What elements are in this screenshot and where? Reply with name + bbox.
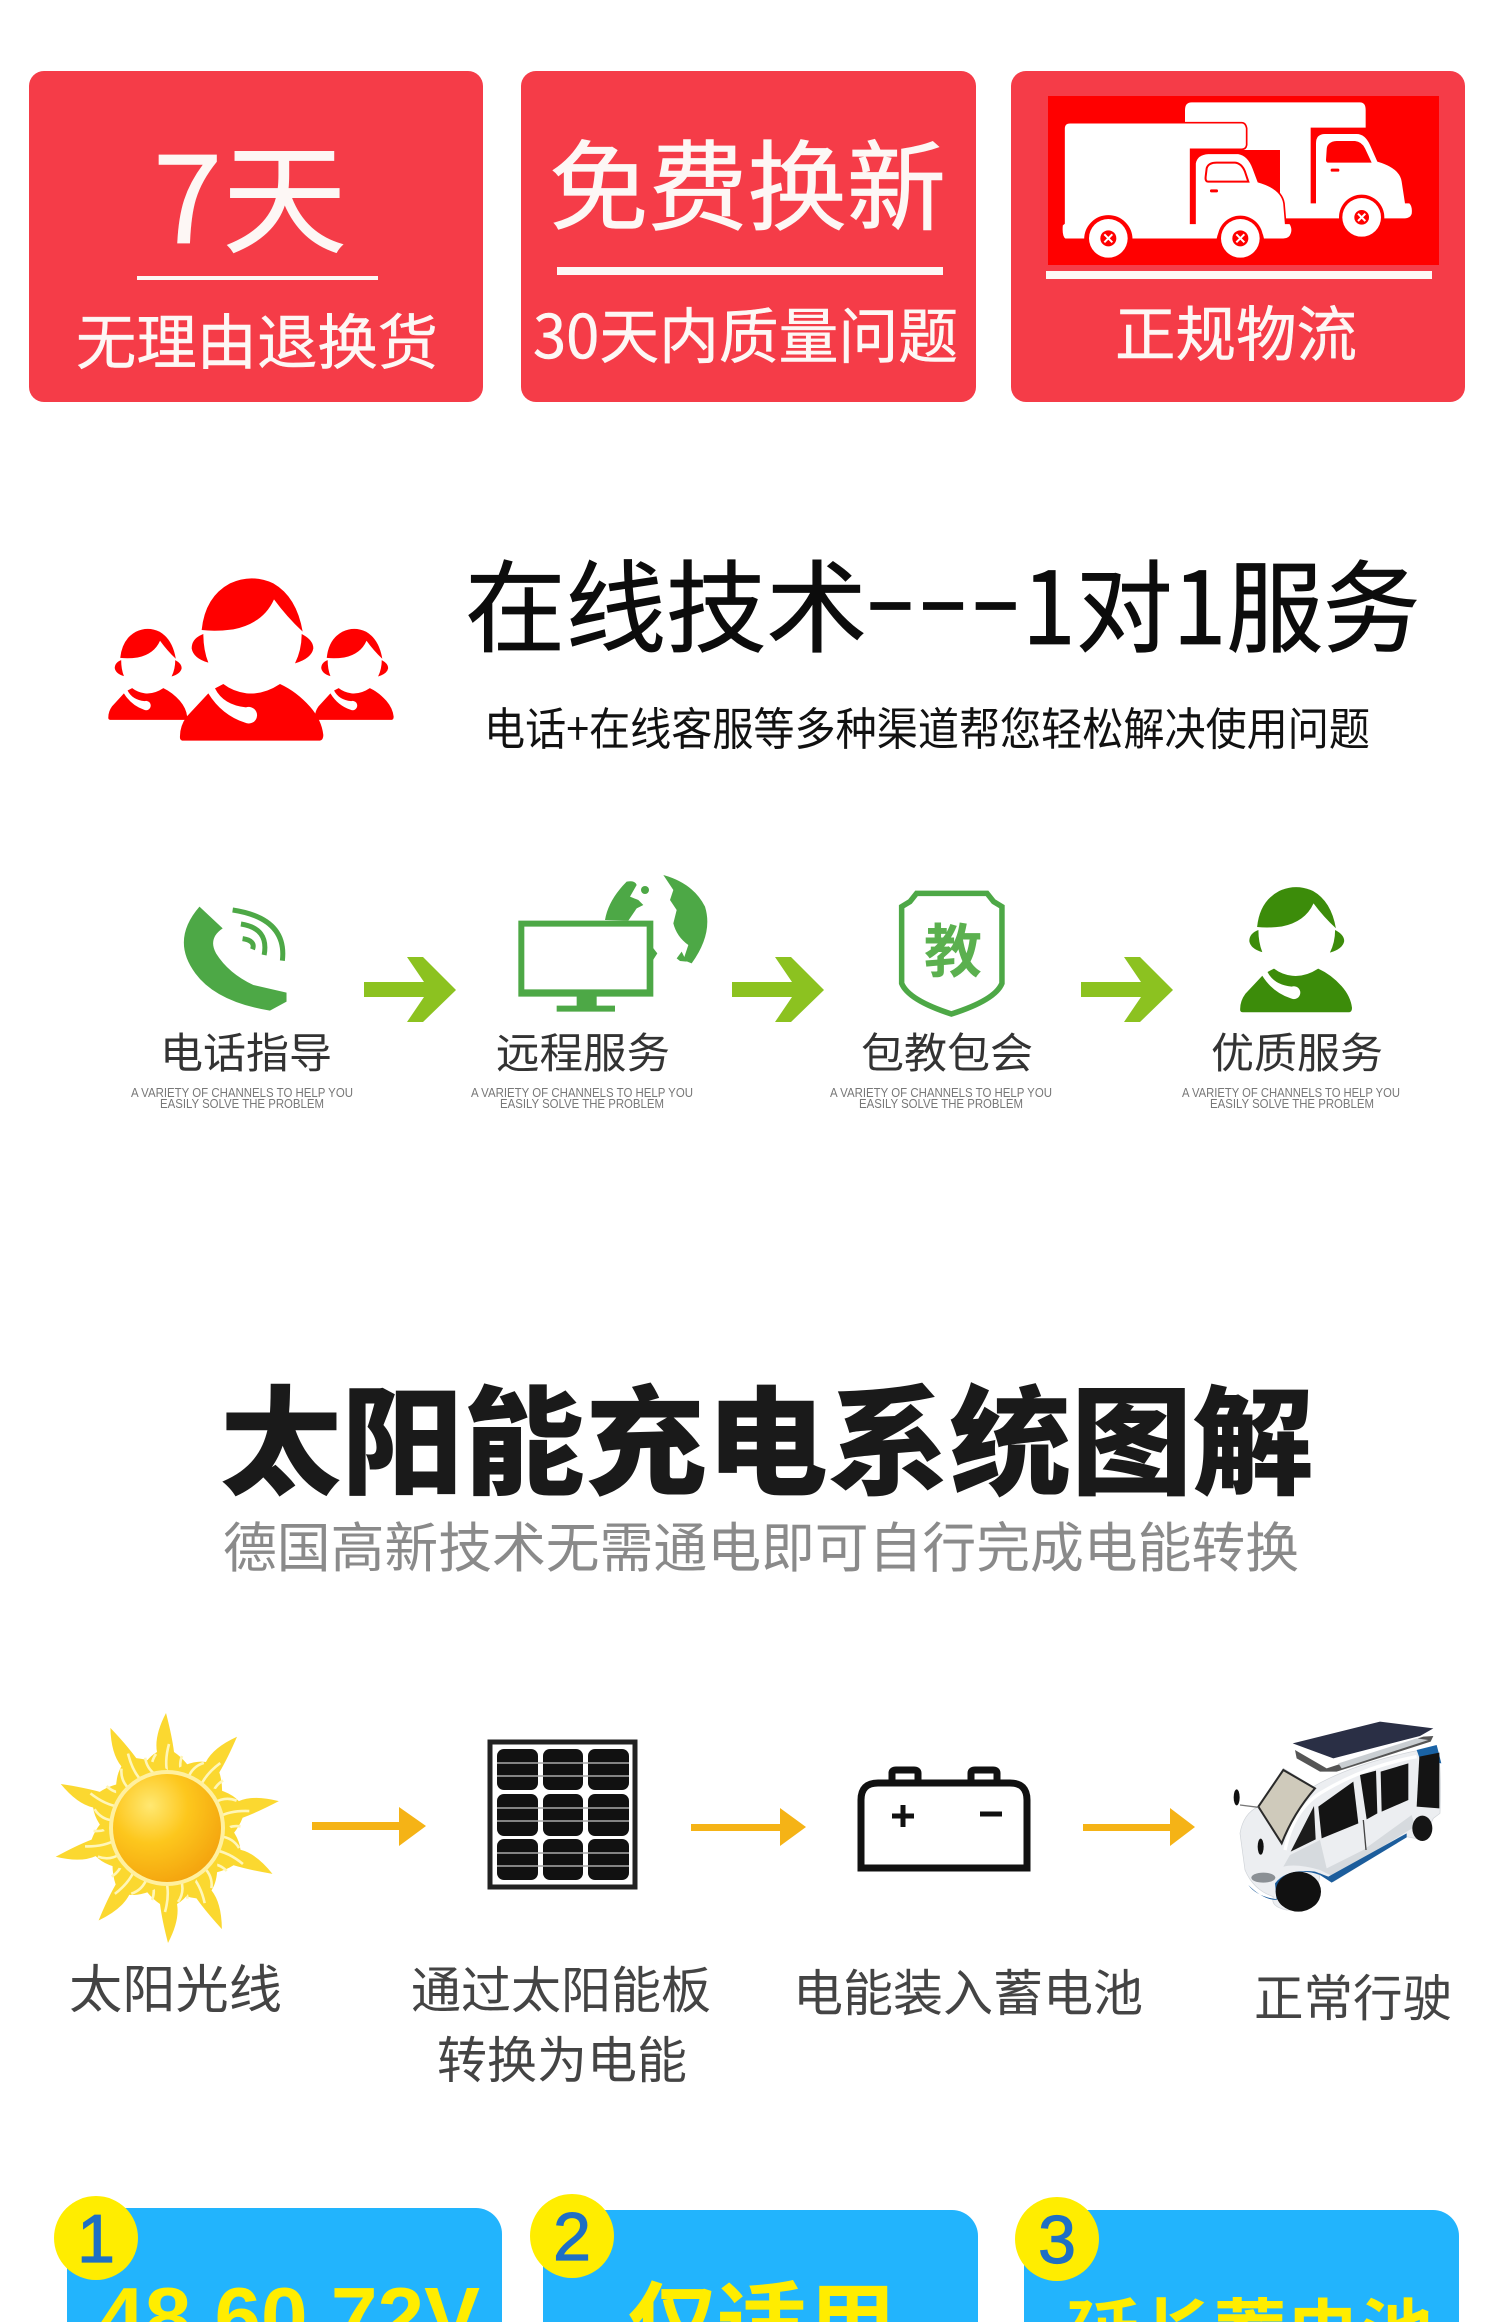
text: caption 4: A VARIETY OF CHANNELS TO HELP YOU bbox=[1182, 1085, 1400, 1100]
text: sunlight: 太阳光线 bbox=[69, 1948, 282, 2023]
heading: online technical support bbox=[465, 518, 1420, 673]
icon: support team bbox=[108, 578, 394, 741]
text: phone guidance: 电话指导 bbox=[160, 1020, 332, 1081]
heading: solar charging system diagram: 太阳能充电系统图解 bbox=[220, 1348, 1314, 1519]
arrow 2 bbox=[732, 957, 824, 1022]
text: through solar panel bbox=[411, 1951, 711, 2093]
panel: free replacement bbox=[521, 71, 976, 402]
icon: teaching shield bbox=[902, 893, 1002, 1014]
text: caption 4 bbox=[1182, 1085, 1400, 1111]
flow: service steps bbox=[131, 875, 1400, 1111]
badge: number 1: 1 bbox=[77, 2201, 115, 2277]
text: no reason returns: 无理由退换货 bbox=[76, 295, 438, 382]
heading: 7 days: 7天 bbox=[153, 104, 347, 278]
panel: applicable card bbox=[530, 2194, 978, 2322]
badge: number 3: 3 bbox=[1038, 2202, 1076, 2278]
badge: number 2 bbox=[530, 2194, 614, 2278]
flow: solar charging steps bbox=[48, 1712, 1452, 2093]
text: caption 2: A VARIETY OF CHANNELS TO HELP YOU bbox=[471, 1085, 693, 1100]
text: through solar panel: 通过太阳能板 bbox=[411, 1951, 711, 2023]
icon: teaching shield: 教 bbox=[924, 905, 982, 989]
text: caption 3: EASILY SOLVE THE PROBLEM bbox=[859, 1096, 1023, 1111]
icon: battery bbox=[861, 1770, 1027, 1868]
text: caption 3 bbox=[830, 1085, 1052, 1111]
icon: delivery trucks bbox=[1062, 102, 1412, 261]
icon: phone bbox=[184, 907, 287, 1011]
arrow: sun to panel bbox=[312, 1807, 426, 1846]
text: through solar panel: 转换为电能 bbox=[437, 2021, 687, 2093]
arrow: battery to vehicle bbox=[1083, 1808, 1195, 1846]
text: normal driving: 正常行驶 bbox=[1254, 1959, 1452, 2031]
text: teaching: 包教包会 bbox=[861, 1020, 1033, 1081]
text: store in battery: 电能装入蓄电池 bbox=[793, 1954, 1143, 2026]
text: support subtitle: 电话+在线客服等多种渠道帮您轻松解决使用问题 bbox=[484, 693, 1370, 758]
icon: quality service agent bbox=[1240, 887, 1352, 1012]
arrow: panel to battery bbox=[691, 1808, 806, 1846]
icon: solar panel bbox=[490, 1742, 635, 1887]
text: caption 1 bbox=[131, 1085, 353, 1111]
text: caption 2 bbox=[471, 1085, 693, 1111]
heading: online technical support: --- bbox=[864, 518, 1022, 663]
badge: number 1 bbox=[54, 2196, 138, 2280]
text: quality service: 优质服务 bbox=[1211, 1020, 1383, 1081]
heading: online technical support: 在线技术 bbox=[465, 528, 867, 673]
badge: number 2: 2 bbox=[553, 2199, 591, 2275]
text: solar subtitle: 德国高新技术无需通电即可自行完成电能转换 bbox=[223, 1504, 1299, 1583]
panel: 7-day returns bbox=[29, 71, 483, 402]
text: caption 1: EASILY SOLVE THE PROBLEM bbox=[160, 1096, 324, 1111]
panel: regular logistics bbox=[1011, 71, 1465, 402]
icon: solar vehicle bbox=[1234, 1722, 1441, 1912]
badge: number 3 bbox=[1015, 2197, 1099, 2281]
heading: free replacement: 免费换新 bbox=[549, 109, 946, 251]
text: caption 3: A VARIETY OF CHANNELS TO HELP YOU bbox=[830, 1085, 1052, 1100]
text: regular logistics: 正规物流 bbox=[1115, 287, 1357, 374]
text: 30 day quality issues: 30天内质量问题 bbox=[533, 289, 958, 376]
text: caption 4: EASILY SOLVE THE PROBLEM bbox=[1210, 1096, 1374, 1111]
panel: battery life card bbox=[1015, 2197, 1459, 2322]
text: caption 1: A VARIETY OF CHANNELS TO HELP YOU bbox=[131, 1085, 353, 1100]
heading: online technical support: 1对1服务 bbox=[1022, 528, 1420, 673]
icon: remote monitor and globe bbox=[518, 875, 707, 1012]
icon: sun bbox=[48, 1712, 286, 1945]
arrow 3 bbox=[1081, 957, 1173, 1022]
text: caption 2: EASILY SOLVE THE PROBLEM bbox=[500, 1096, 664, 1111]
arrow 1 bbox=[364, 957, 456, 1022]
panel: voltage card bbox=[54, 2196, 502, 2322]
text: remote service: 远程服务 bbox=[496, 1020, 670, 1081]
